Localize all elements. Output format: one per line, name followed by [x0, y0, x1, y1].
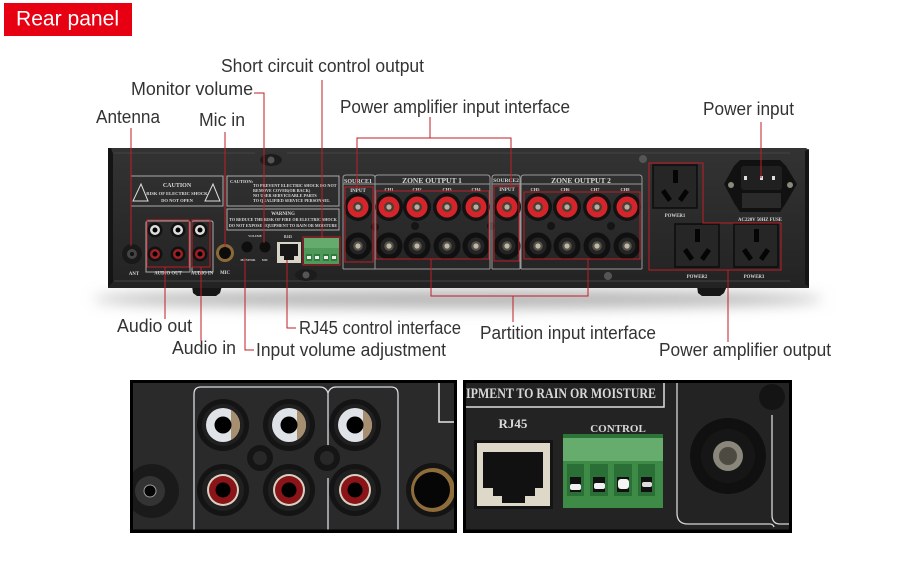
power outlets: POWER2 [687, 275, 708, 280]
label: Power amplifier input interface [340, 97, 570, 187]
caution text label: REMOVE COVER(OR BACK) [253, 188, 311, 193]
volume knobs [241, 234, 270, 262]
label: Antenna [96, 107, 161, 246]
source and zone headings: ZONE OUTPUT 1 [402, 176, 462, 185]
caution label: CAUTION [163, 183, 192, 189]
warning label: TO REDUCE THE RISK OF FIRE OR ELECTRIC SHOCK [229, 217, 338, 222]
AC power inlet with fuse [724, 160, 797, 223]
source and zone headings: CH4 [472, 187, 481, 192]
source and zone headings: SOURCE2 [493, 178, 519, 184]
audio out and audio in RCA jacks: AUDIO IN [191, 272, 214, 276]
caution text label [227, 176, 339, 206]
label: Partition input interface [431, 259, 656, 343]
volume knobs: MONITOR [241, 258, 256, 262]
black binding posts [344, 232, 640, 260]
label: RJ45 control interface: RJ45 control interface [299, 318, 461, 338]
source and zone headings [343, 175, 642, 269]
caution text label: TO PREVENT ELECTRIC SHOCK DO NOT [253, 183, 337, 188]
RJ45 port [277, 235, 301, 263]
caution text label: TO QUALIFIED SERVICE PERSONNEL [253, 198, 330, 203]
amplifier rear panel photo [93, 148, 823, 308]
source and zone headings: CH1 [384, 187, 394, 192]
red binding posts [344, 193, 641, 221]
caution label: RISK OF ELECTRIC SHOCK [146, 191, 208, 196]
power outlets [653, 165, 778, 280]
source and zone headings: CH3 [442, 187, 452, 192]
source and zone headings: CH6 [560, 187, 570, 192]
source and zone headings: CH5 [530, 187, 540, 192]
detail photo: RJ45 and control terminal: RJ45 [499, 416, 528, 431]
label: Monitor volume [131, 79, 264, 243]
label: Power input [703, 99, 794, 178]
source and zone headings: CH2 [412, 187, 422, 192]
label: Monitor volume: Monitor volume [131, 79, 253, 99]
label: Input volume adjustment [245, 258, 446, 360]
audio out and audio in RCA jacks: AUDIO OUT [154, 272, 183, 276]
header: Rear panel [4, 3, 132, 36]
green control terminal [304, 238, 339, 264]
label: Partition input interface: Partition input interface [480, 323, 656, 343]
AC power inlet with fuse: AC220V 50HZ FUSE [738, 218, 782, 223]
warning label: WARNING [271, 212, 295, 217]
mic jack: MIC [220, 271, 230, 276]
label: Antenna: Antenna [96, 107, 161, 127]
label: Mic in [199, 110, 245, 247]
label: Power amplifier output: Power amplifier output [659, 340, 831, 360]
label: Power input: Power input [703, 99, 794, 119]
RJ45 socket [474, 440, 553, 509]
detail photo: audio jacks [125, 381, 460, 532]
label: Power amplifier input interface: Power amplifier input interface [340, 97, 570, 117]
warning label [227, 209, 339, 230]
power outlets: POWER3 [744, 275, 765, 280]
label: Mic in: Mic in [199, 110, 245, 130]
warning label: DO NOT EXPOSE EQUIPMENT TO RAIN OR MOISTURE [229, 223, 337, 228]
source and zone headings: CH7 [590, 187, 600, 192]
source and zone headings: ZONE OUTPUT 2 [551, 176, 611, 185]
caution label: DO NOT OPEN [161, 198, 194, 203]
label: Audio out: Audio out [117, 316, 192, 336]
source and zone headings: CH8 [620, 187, 630, 192]
audio out and audio in RCA jacks [146, 221, 214, 276]
source and zone headings: SOURCE1 [344, 179, 372, 185]
caution label [131, 176, 223, 206]
mic jack [216, 244, 234, 276]
label: Input volume adjustment: Input volume adjustment [256, 340, 446, 360]
antenna jack: ANT [129, 272, 140, 277]
red highlight boxes [147, 163, 781, 270]
detail photo: RJ45 and control terminal [463, 381, 792, 532]
screws [260, 154, 647, 281]
label: Audio in: Audio in [172, 338, 236, 358]
label: Audio out [117, 267, 192, 336]
power outlets: POWER1 [665, 214, 686, 219]
label: RJ45 control interface [287, 260, 461, 338]
volume knobs: MIC [262, 258, 268, 262]
antenna jack [122, 244, 142, 277]
black connector [690, 418, 766, 494]
source and zone headings: INPUT [499, 188, 515, 193]
header: Rear panel: Rear panel [16, 8, 119, 30]
label: Audio in [172, 267, 236, 358]
volume knobs: VOLUME [248, 234, 262, 238]
caution text label: NO USER SERVICEABLE PARTS [253, 193, 317, 198]
caution text label: CAUTION: [230, 179, 254, 184]
source and zone headings: INPUT [350, 189, 366, 194]
label: Short circuit control output: Short circuit control output [221, 56, 424, 76]
detail photo: RJ45 and control terminal: IPMENT TO RAIN OR MOISTURE [466, 386, 656, 402]
RJ45 port: RJ45 [284, 235, 292, 239]
green terminal block [563, 434, 663, 508]
detail photo: RJ45 and control terminal: CONTROL [590, 423, 646, 435]
